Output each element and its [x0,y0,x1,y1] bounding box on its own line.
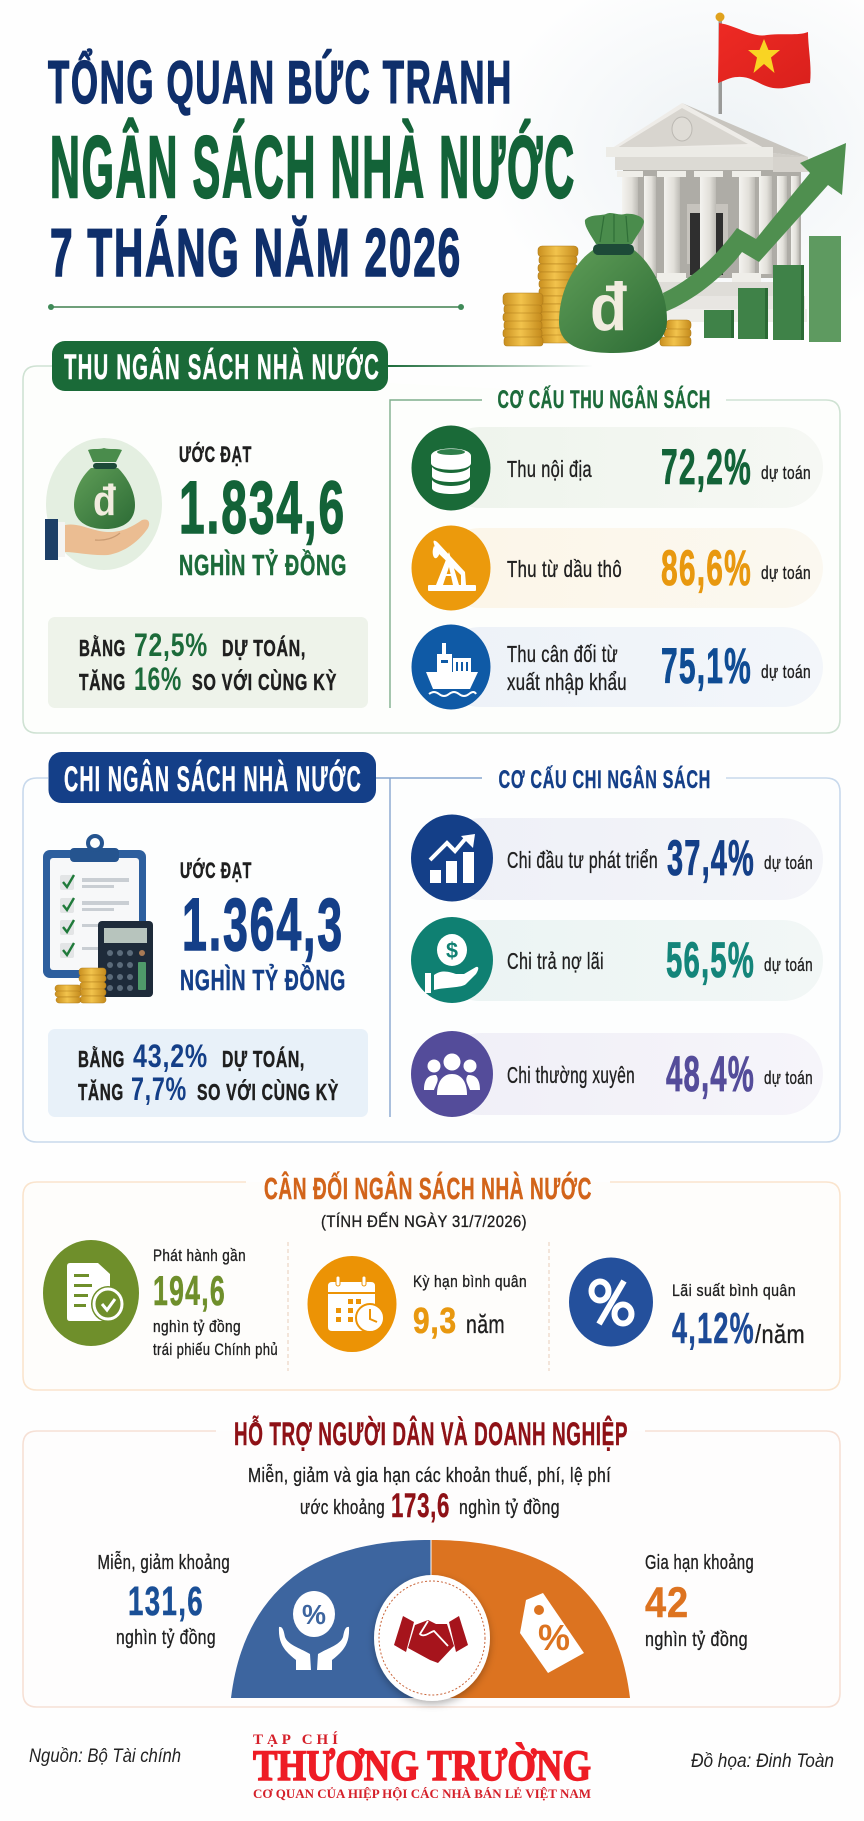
callout: comparison: DỰ TOÁN, [222,1045,305,1072]
row: chi thường xuyên [411,1031,823,1117]
left figure: miễn giảm: 131,6 [128,1578,204,1624]
footer: credit: Đồ họa: Đinh Toàn [691,1751,834,1772]
callout: comparison: BẰNG [79,634,126,661]
row: thu nội địa: Thu nội địa [507,456,592,482]
title line 3: 7 THÁNG NĂM 2026 [50,215,462,291]
icon: clipboard with calculator [43,836,153,1003]
stat: average term [308,1256,527,1352]
icon: building [606,103,808,322]
column divider [376,778,482,1117]
estimated revenue figure: ƯỚC ĐẠT [179,442,252,467]
icon: percent [592,1281,632,1324]
date note: (TÍNH ĐẾN NGÀY 31/7/2026) [321,1212,527,1231]
footer: source: Nguồn: Bộ Tài chính [29,1746,181,1767]
row: trả nợ lãi: dự toán [764,955,813,975]
row: thu nội địa: dự toán [761,463,811,483]
half-circle chart [231,1540,630,1701]
title [48,49,576,291]
right figure: gia hạn: Gia hạn khoảng [645,1552,754,1574]
icon: hand holding money bag [45,438,162,570]
estimated spending figure [180,858,346,997]
sub heading: CƠ CẤU CHI NGÂN SÁCH [498,764,711,794]
row: xuất nhập khẩu [412,624,823,710]
icon: handshake [374,1575,490,1701]
row: trả nợ lãi: Chi trả nợ lãi [507,948,604,974]
summary text: Miễn, giảm và gia hạn các khoản thuế, phí, lệ phí [248,1464,611,1487]
callout: comparison: 16% [134,661,182,697]
row: thu từ dầu thô [412,526,823,610]
summary text: ước khoảng [300,1497,385,1519]
footer: logo: TẠP CHÍ [253,1731,338,1748]
row: đầu tư phát triển: dự toán [764,853,813,873]
estimated spending figure: ƯỚC ĐẠT [180,858,252,883]
panel frame [23,778,840,1142]
panel: cân đối ngân sách [23,1170,840,1390]
estimated revenue figure [179,442,347,582]
right figure: gia hạn: 42 [645,1579,689,1627]
icon: flag [716,12,811,114]
panel: chi ngân sách [23,752,840,1142]
column divider [390,400,482,708]
panel frame [23,366,840,733]
icon: hands holding percent: % [302,1599,326,1630]
chart segment: miễn giảm [231,1540,430,1698]
stat: bond issuance: nghìn tỷ đồng [153,1317,241,1336]
stat: average term: năm [466,1309,505,1339]
row: thu từ dầu thô: dự toán [761,563,811,583]
panel heading: CÂN ĐỐI NGÂN SÁCH NHÀ NƯỚC [264,1170,592,1206]
callout: comparison [48,1029,368,1117]
illustration: treasury building, flag, money bag, growth chart [503,12,846,353]
callout: comparison: BẰNG [78,1045,125,1072]
icon: calendar clock [328,1276,384,1332]
icon: rising chart [430,834,475,883]
title divider [48,304,464,310]
left figure: miễn giảm [98,1551,230,1649]
icon: growth arrow [663,143,846,312]
callout: comparison: DỰ TOÁN, [222,634,306,661]
icon: hands holding percent [279,1591,349,1670]
icon: dollar in hand: $ [446,938,458,963]
row: đầu tư phát triển: Chi đầu tư phát triển [507,847,658,873]
summary text: nghìn tỷ đồng [459,1497,560,1519]
row: thu nội địa: 72,2% [661,439,752,495]
row: xuất nhập khẩu: Thu cân đối từ [507,641,618,667]
icon: ship [426,643,478,696]
panel heading: CHI NGÂN SÁCH NHÀ NƯỚC [64,759,362,799]
callout: comparison: 72,5% [134,627,208,663]
panel frame [23,1182,840,1390]
title line 1: TỔNG QUAN BỨC TRANH [48,49,513,116]
header fade line [388,365,593,367]
chart segment: gia hạn [432,1540,630,1698]
icon: money bag [559,213,667,353]
row: thu nội địa [412,426,823,510]
bar chart [704,236,841,342]
panel heading [52,341,388,391]
icon: hand holding money bag: đ [93,476,116,525]
icon: money bag: đ [590,269,627,345]
estimated revenue figure: NGHÌN TỶ ĐỒNG [179,548,347,582]
footer: logo [253,1731,591,1801]
right figure: gia hạn [645,1552,754,1651]
stat: bond issuance: 194,6 [153,1267,226,1314]
row: chi thường xuyên: Chi thường xuyên [507,1062,635,1088]
summary text: 173,6 [391,1487,450,1525]
panel heading [48,752,376,803]
estimated spending figure: NGHÌN TỶ ĐỒNG [180,963,346,997]
panel frame [23,1431,840,1707]
right figure: gia hạn: nghìn tỷ đồng [645,1629,748,1651]
stat: average term: Kỳ hạn bình quân [413,1272,527,1291]
callout: comparison [48,617,368,708]
icon: percent tag: % [538,1617,570,1658]
callout: comparison: 43,2% [133,1038,208,1074]
icon: percent tag [520,1593,584,1673]
row: chi thường xuyên: 48,4% [666,1046,755,1102]
footer: logo: THƯƠNG TRƯỜNG [253,1743,591,1790]
icon: coin stack [431,448,471,494]
panel: hỗ trợ người dân và doanh nghiệp [23,1416,840,1707]
row: chi thường xuyên: dự toán [764,1068,813,1088]
callout: comparison: 7,7% [131,1071,187,1107]
estimated spending figure: 1.364,3 [182,883,344,966]
stat: average interest [569,1258,805,1353]
icon: coins [503,246,691,346]
stat: bond issuance: trái phiếu Chính phủ [153,1340,278,1359]
row: thu từ dầu thô: Thu từ dầu thô [507,556,622,582]
icon: dollar in hand [425,934,478,993]
icon: people [424,1054,480,1095]
callout: comparison: TĂNG [79,668,126,695]
icon: oil pump [428,541,476,591]
stat: average term: 9,3 [413,1300,457,1341]
sub heading: CƠ CẤU THU NGÂN SÁCH [498,384,711,414]
row: trả nợ lãi: 56,5% [666,932,755,988]
callout: comparison: TĂNG [78,1078,124,1105]
stat: average interest: Lãi suất bình quân [672,1281,796,1300]
estimated revenue figure: 1.834,6 [179,466,346,549]
stat: average interest: /năm [755,1319,805,1349]
left figure: miễn giảm: Miễn, giảm khoảng [98,1551,230,1574]
row: thu từ dầu thô: 86,6% [661,540,752,596]
stat: average interest: 4,12% [672,1304,755,1353]
icon: document check [67,1263,125,1322]
row: xuất nhập khẩu: 75,1% [661,638,752,694]
panel: thu ngân sách [23,341,840,733]
callout: comparison: SO VỚI CÙNG KỲ [192,668,337,695]
row: xuất nhập khẩu: dự toán [761,662,811,682]
row: xuất nhập khẩu: xuất nhập khẩu [507,669,627,695]
panel heading: THU NGÂN SÁCH NHÀ NƯỚC [64,347,380,387]
row: đầu tư phát triển: 37,4% [667,830,755,886]
left figure: miễn giảm: nghìn tỷ đồng [116,1627,216,1649]
summary text [248,1464,611,1525]
stat: bond issuance [43,1240,278,1359]
stat: bond issuance: Phát hành gần [153,1246,246,1265]
footer: logo: CƠ QUAN CỦA HIỆP HỘI CÁC NHÀ BÁN LẺ VIỆT NAM [253,1786,591,1801]
row: đầu tư phát triển [411,814,823,902]
callout: comparison: SO VỚI CÙNG KỲ [197,1078,339,1105]
row: trả nợ lãi [411,917,823,1003]
